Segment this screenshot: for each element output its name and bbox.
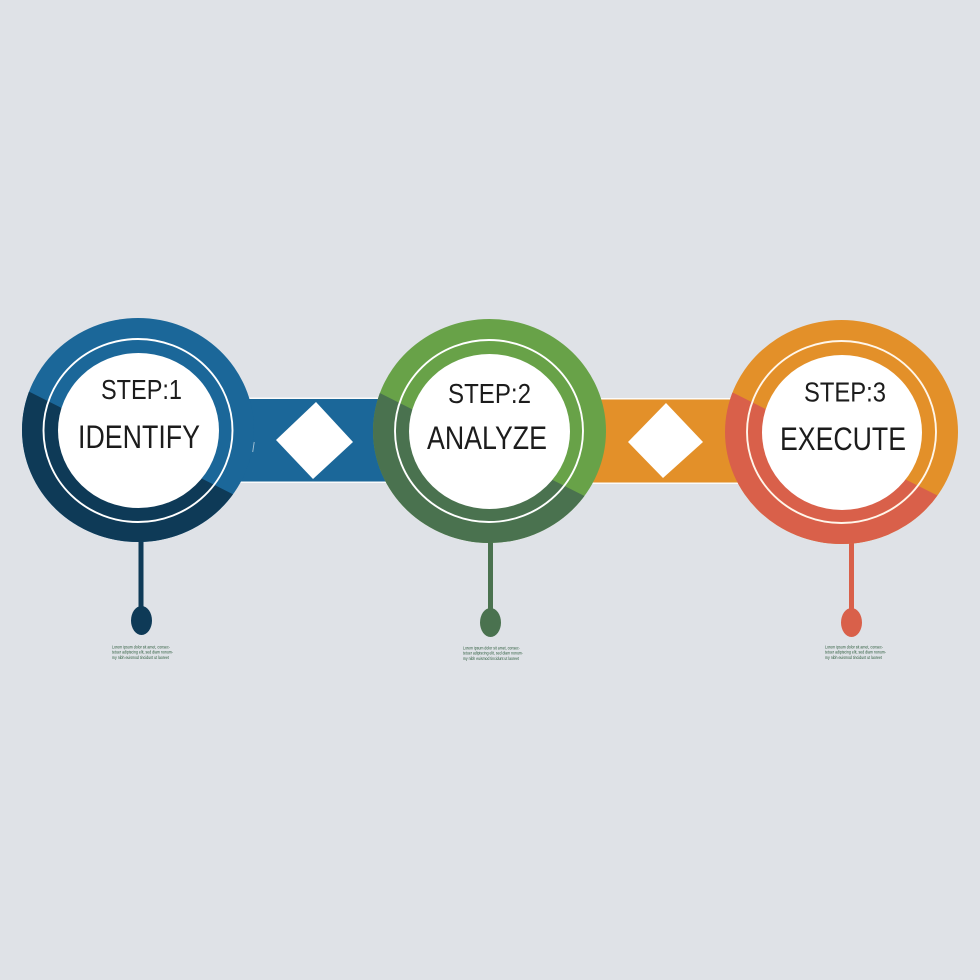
connector band: orange — [575, 398, 745, 484]
step 1 body text — [112, 644, 173, 660]
step 2 body text: my nibh euismod tincidunt ut laoreet — [463, 656, 520, 661]
step 2 pin — [480, 535, 501, 637]
step 1 body text: my nibh euismod tincidunt ut laoreet — [112, 655, 170, 660]
step 1 circle — [22, 318, 254, 542]
diamond: blue band — [276, 402, 353, 479]
step 1 body text: Lorem ipsum dolor sit amet, consec- — [112, 644, 170, 650]
step 3 pin — [841, 535, 862, 637]
step 3 title: EXECUTE — [780, 421, 906, 457]
step 2 label: STEP:2 — [448, 378, 531, 409]
step 2 circle — [373, 319, 606, 543]
step 2 title: ANALYZE — [427, 420, 547, 456]
step 1 title: IDENTIFY — [78, 419, 200, 455]
connector band: blue — [225, 398, 395, 483]
step 3 body text: tetuer adipiscing elit, sed diam nonum- — [825, 650, 886, 654]
step 3 body text: my nibh euismod tincidunt ut laoreet — [825, 655, 883, 660]
step 3 circle — [725, 320, 958, 544]
step 1 pin — [131, 535, 152, 635]
infographic: three-step process — [22, 318, 958, 661]
diamond: orange band — [628, 403, 703, 478]
step 1 body text: tetuer adipiscing elit, sed diam nonum- — [112, 650, 173, 654]
step 2 body text: tetuer adipiscing elit, sed diam nonum- — [463, 650, 523, 656]
step 3 body text — [825, 644, 886, 660]
step 1 label: STEP:1 — [101, 374, 182, 405]
step 2 body text — [463, 646, 523, 661]
step 3 label: STEP:3 — [804, 376, 886, 408]
step 3 body text: Lorem ipsum dolor sit amet, consec- — [825, 644, 883, 650]
step 2 body text: Lorem ipsum dolor sit amet, consec- — [463, 646, 520, 650]
